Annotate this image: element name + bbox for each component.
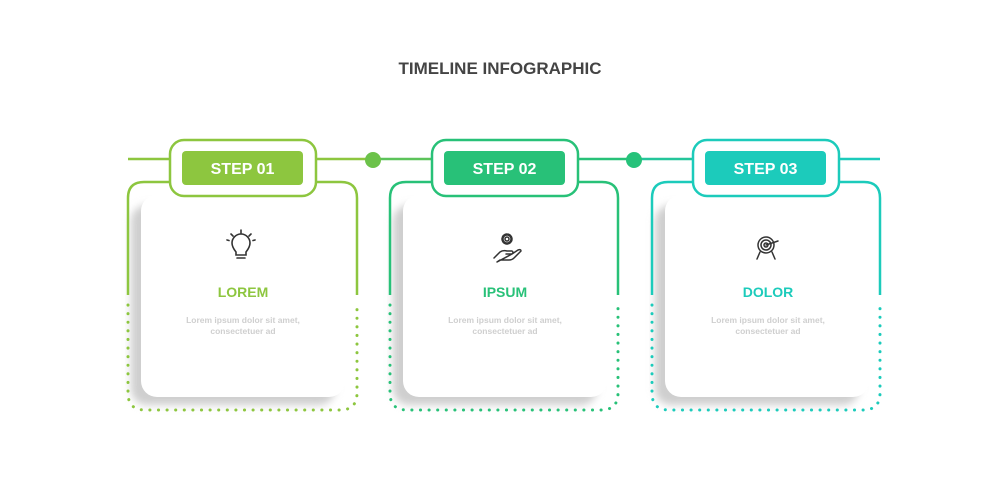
panel: step 01: LOREM (218, 284, 268, 300)
panel: step 02: consectetuer ad (472, 326, 538, 336)
panel: step 02: STEP 02 (473, 161, 536, 178)
timeline dots (365, 152, 642, 168)
panel: step 03: consectetuer ad (735, 326, 801, 336)
panel: step 03 (652, 140, 880, 410)
panel: step 03: STEP 03 (734, 161, 797, 178)
panel: step 01: consectetuer ad (210, 326, 276, 336)
panel: step 03: DOLOR (743, 284, 793, 300)
icon: gear in hand (494, 234, 521, 262)
panel: step 02: Lorem ipsum dolor sit amet, (448, 315, 562, 325)
panel: step 02 (390, 140, 618, 410)
icon: target (757, 237, 778, 259)
panel: step 03: Lorem ipsum dolor sit amet, (711, 315, 825, 325)
panel: step 01: STEP 01 (211, 161, 274, 178)
panel: step 01: Lorem ipsum dolor sit amet, (186, 315, 300, 325)
icon: light bulb (227, 230, 255, 258)
timeline line (128, 158, 880, 160)
panel: step 01 (128, 140, 357, 410)
title: TIMELINE INFOGRAPHIC (398, 59, 602, 78)
panel: step 02: IPSUM (483, 284, 527, 300)
